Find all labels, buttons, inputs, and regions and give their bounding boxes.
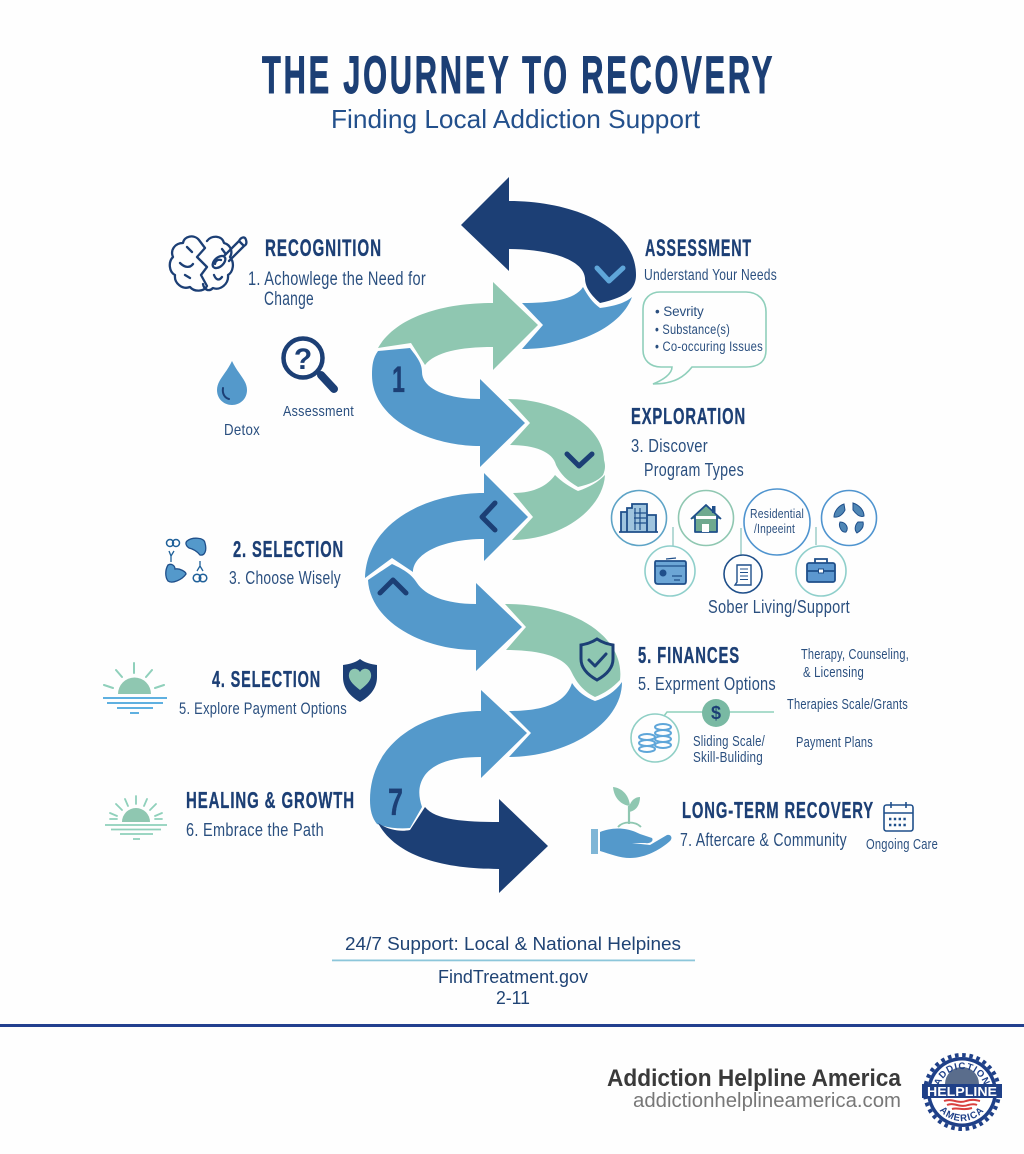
circle: residential: Residential xyxy=(750,506,804,521)
icon: dollar circle xyxy=(702,699,730,727)
bullets xyxy=(655,304,763,354)
helpline block xyxy=(332,933,695,1008)
arrow segment: green finance curve xyxy=(505,604,620,697)
bullets: • Substance(s) xyxy=(655,322,730,337)
heading: EXPLORATION xyxy=(631,403,746,429)
bullets: • Sevrity xyxy=(655,304,704,319)
program type circles xyxy=(612,489,876,596)
section: long-term recovery xyxy=(591,787,938,858)
icon: globe circle xyxy=(822,490,876,546)
serpentine arrow path xyxy=(365,177,636,893)
icon: brain with wrench xyxy=(170,236,246,291)
icon: water drop xyxy=(217,361,247,405)
text: 3. Discover xyxy=(631,436,708,456)
logo badge: AMERICA xyxy=(940,1108,984,1122)
divider xyxy=(332,960,695,961)
text: Skill-Buliding xyxy=(693,750,763,766)
icon: selection symbols xyxy=(166,538,207,582)
text: Therapies Scale/Grants xyxy=(787,697,908,713)
arrow segment: blue middle xyxy=(365,473,528,578)
heading: HEALING & GROWTH xyxy=(186,787,355,813)
icon: calendar xyxy=(884,802,913,831)
heading: 2. SELECTION xyxy=(233,536,344,562)
icon: sunrise xyxy=(103,663,167,713)
brand url: addictionhelplineamerica.com xyxy=(633,1090,901,1112)
circle: residential: /Inpeeint xyxy=(754,521,795,536)
arrow segment: dark start xyxy=(461,177,636,303)
text: 3. Choose Wisely xyxy=(229,568,341,588)
label: detox: Detox xyxy=(224,422,260,439)
arrow segment: blue step 7 xyxy=(370,690,527,828)
section: healing and growth xyxy=(105,787,355,840)
section: exploration xyxy=(631,403,746,480)
label: assessment: Assessment xyxy=(283,403,354,420)
icon: document circle xyxy=(724,555,762,593)
icon: dollar circle: $ xyxy=(711,703,721,723)
bullets: • Co-occuring Issues xyxy=(655,339,763,354)
logo badge xyxy=(922,1053,1002,1131)
section: finances xyxy=(631,642,909,766)
text: Sliding Scale/ xyxy=(693,734,766,750)
connector: green lower tail xyxy=(512,475,605,540)
text: 6. Embrace the Path xyxy=(186,819,324,840)
text: Program Types xyxy=(644,460,744,480)
logo badge: HELPLINE xyxy=(927,1084,997,1099)
text: Therapy, Counseling, xyxy=(801,647,909,663)
section: recognition xyxy=(170,235,426,310)
text: FindTreatment.gov xyxy=(438,967,588,987)
brand name: Addiction Helpline America xyxy=(607,1065,902,1092)
chevron on green curve xyxy=(567,454,592,466)
text: Payment Plans xyxy=(796,735,873,751)
chevron on blue middle xyxy=(482,503,495,530)
text: Understand Your Needs xyxy=(644,267,777,284)
text: 2-11 xyxy=(496,988,530,1008)
chevron on blue lower xyxy=(380,580,406,593)
heading: 5. FINANCES xyxy=(638,642,740,668)
icon: sun over water xyxy=(105,796,167,839)
step number 1: 1 xyxy=(392,359,405,400)
text: 24/7 Support: Local & National Helpines xyxy=(345,933,681,954)
arrow segment: step 1 blue xyxy=(372,348,525,467)
section: selection 2 xyxy=(166,536,344,588)
icon: shield check xyxy=(581,639,613,680)
label: sober living: Sober Living/Support xyxy=(708,597,850,617)
text: 5. Explore Payment Options xyxy=(179,700,347,718)
speech bubble xyxy=(643,292,766,384)
text: & Licensing xyxy=(803,665,864,681)
icon: coins circle xyxy=(631,714,679,762)
arrow segment: green top xyxy=(378,282,538,370)
heading: ASSESSMENT xyxy=(645,235,752,262)
text: Ongoing Care xyxy=(866,837,938,853)
icon: card circle xyxy=(645,546,695,596)
heading: RECOGNITION xyxy=(265,235,382,262)
chevron on dark arrow xyxy=(597,268,623,281)
section: assessment xyxy=(643,235,777,384)
step number 7: 7 xyxy=(388,782,403,824)
arrow segment: blue lower xyxy=(368,564,522,671)
arrow segment: dark end xyxy=(378,799,548,893)
icon: building circle xyxy=(612,490,666,546)
logo badge: ADDICTION xyxy=(934,1062,990,1084)
text: 7. Aftercare & Community xyxy=(680,830,847,850)
icon: shield heart xyxy=(343,659,377,702)
footer rule xyxy=(0,1024,1024,1027)
section: selection 4 xyxy=(103,659,377,718)
subtitle: Finding Local Addiction Support xyxy=(331,104,701,134)
text: 1. Achowlege the Need for xyxy=(248,269,426,290)
icon: magnifier question xyxy=(284,338,334,389)
text: 5. Exprment Options xyxy=(638,673,776,694)
icon: house circle xyxy=(678,490,734,546)
text: Change xyxy=(264,289,314,310)
heading: LONG-TERM RECOVERY xyxy=(682,797,874,823)
connector: blue tail after finance xyxy=(509,682,622,757)
icon: hand with sprout xyxy=(591,787,671,858)
connector: blue tail under dark arrow xyxy=(522,287,632,349)
icon: briefcase circle xyxy=(796,546,846,596)
icon: magnifier question: ? xyxy=(294,343,312,376)
connector line xyxy=(664,712,774,716)
circle: residential xyxy=(744,489,810,555)
heading: 4. SELECTION xyxy=(212,666,321,692)
arrow segment: green curve xyxy=(508,399,605,487)
